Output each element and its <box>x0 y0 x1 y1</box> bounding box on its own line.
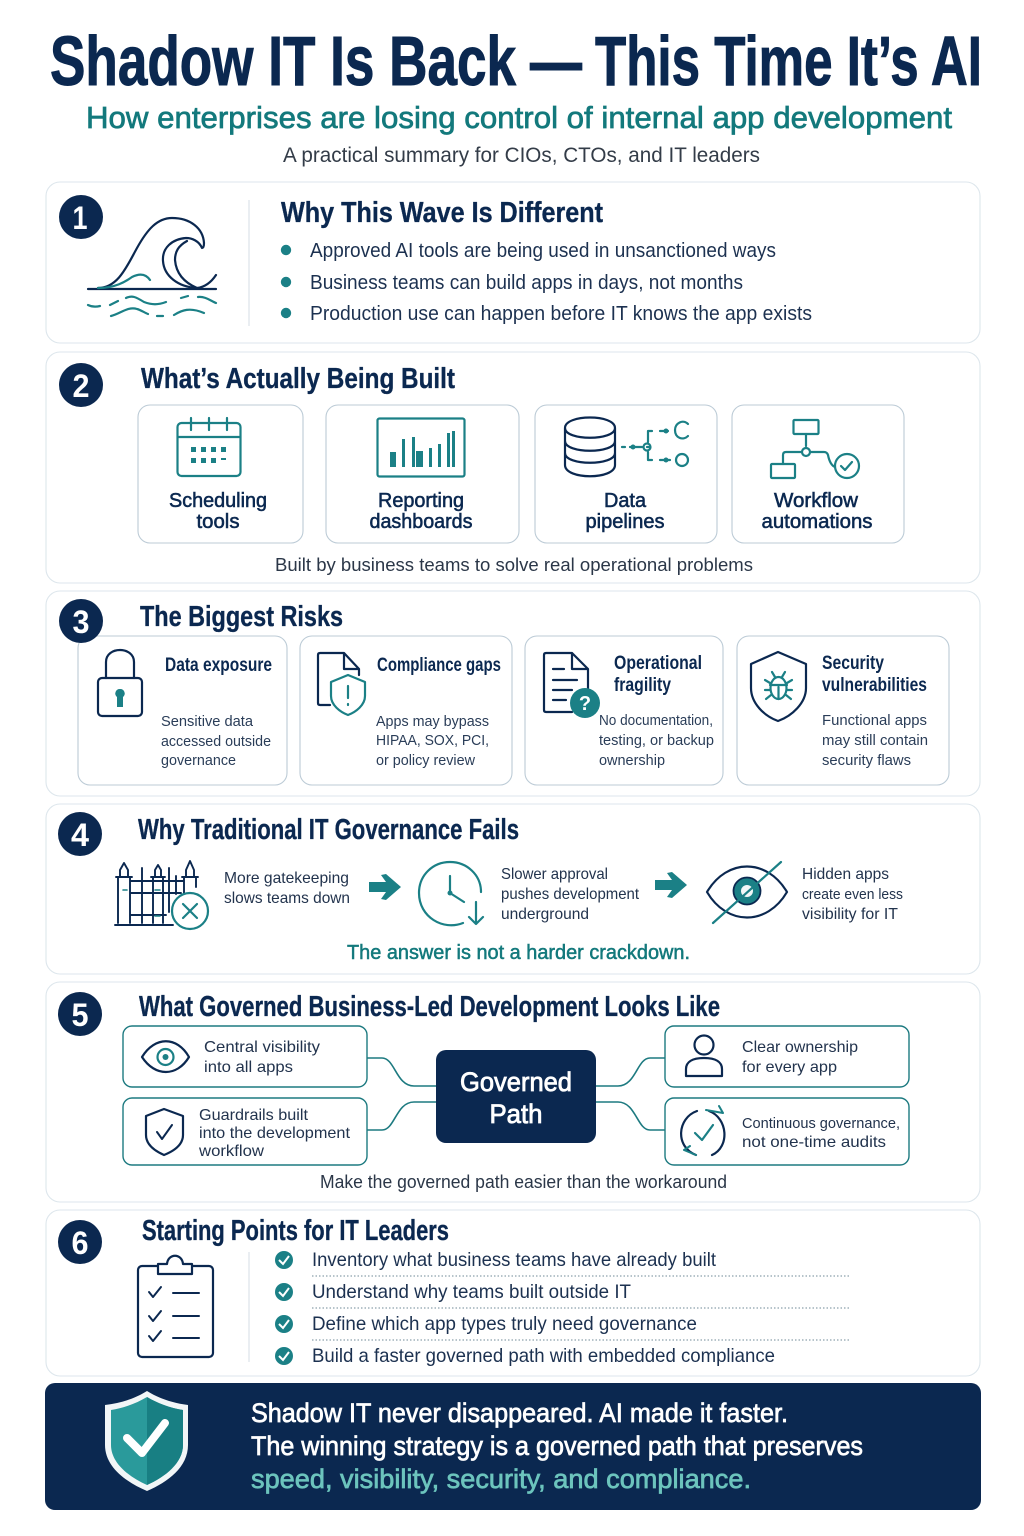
box: guardrails: Guardrails built <box>199 1107 309 1124</box>
text <box>251 1398 863 1494</box>
box: continuous governance: Continuous governance, <box>742 1115 900 1132</box>
card: scheduling tools: Scheduling <box>169 490 267 512</box>
heading: Why This Wave Is Different <box>281 197 603 229</box>
text: slower approval: pushes development <box>501 886 640 903</box>
card: reporting dashboards: dashboards <box>370 511 472 533</box>
number badge 2 <box>59 363 103 407</box>
text: slower approval: underground <box>501 906 589 923</box>
card: security vulnerabilities: security flaws <box>822 752 911 769</box>
card: security vulnerabilities: may still contain <box>822 732 928 749</box>
text: more gatekeeping <box>224 870 350 907</box>
panel: what's being built <box>46 352 980 583</box>
number badge 3 <box>59 599 103 643</box>
title: — <box>530 22 582 100</box>
box: clear ownership <box>665 1026 909 1087</box>
card: reporting dashboards: Reporting <box>378 490 464 512</box>
box: central visibility: into all apps <box>204 1059 293 1076</box>
banner: conclusion <box>45 1383 981 1510</box>
center node: governed path: Path <box>490 1099 542 1129</box>
heading: Why Traditional IT Governance Fails <box>138 814 519 846</box>
box: continuous governance: not one-time audits <box>742 1134 886 1151</box>
card: data exposure: accessed outside <box>161 733 271 750</box>
connectors <box>367 1058 665 1130</box>
text: slower approval <box>501 866 640 923</box>
text: hidden apps <box>802 866 903 923</box>
card: compliance gaps: Apps may bypass <box>376 713 489 730</box>
text: more gatekeeping: slows teams down <box>224 890 350 907</box>
bullet list: Approved AI tools are being used in unsanctioned ways <box>310 240 776 262</box>
checklist <box>275 1249 850 1367</box>
number badge 5: 5 <box>72 997 88 1033</box>
card: scheduling tools: tools <box>196 511 240 533</box>
card: data exposure <box>78 636 287 785</box>
text: The winning strategy is a governed path that preserves <box>251 1431 863 1461</box>
bullet list <box>281 240 812 325</box>
card: workflow automations: Workflow <box>774 490 859 512</box>
card: security vulnerabilities: Security <box>822 653 884 674</box>
card: operational fragility: fragility <box>614 675 671 696</box>
number badge 4 <box>58 812 102 856</box>
card: workflow automations: automations <box>762 511 872 533</box>
icon: clipboard <box>138 1256 213 1357</box>
text: hidden apps: visibility for IT <box>802 906 898 923</box>
card: data pipelines: pipelines <box>586 511 664 533</box>
card: operational fragility: Operational <box>614 653 702 674</box>
card: operational fragility: ownership <box>599 752 665 769</box>
text: speed, visibility, security, and compliance. <box>251 1464 751 1494</box>
box: central visibility <box>123 1026 367 1087</box>
heading: What’s Actually Being Built <box>141 363 455 395</box>
checklist: Understand why teams built outside IT <box>312 1281 631 1303</box>
card: compliance gaps <box>300 636 512 785</box>
card: operational fragility: No documentation, <box>599 712 713 729</box>
number badge 6 <box>58 1220 102 1264</box>
checklist: Build a faster governed path with embedded compliance <box>312 1345 775 1367</box>
checklist: Define which app types truly need governance <box>312 1313 697 1335</box>
card: data exposure: governance <box>161 752 236 769</box>
box: continuous governance <box>665 1098 909 1165</box>
number badge 1 <box>59 195 103 239</box>
box: guardrails <box>123 1098 367 1165</box>
icon: wave <box>88 218 216 316</box>
card: compliance gaps: or policy review <box>376 752 475 769</box>
heading: Starting Points for IT Leaders <box>142 1215 449 1247</box>
number badge 2: 2 <box>72 368 90 404</box>
box: central visibility: Central visibility <box>204 1039 320 1056</box>
tagline: A practical summary for CIOs, CTOs, and IT leaders <box>283 144 760 167</box>
card: reporting dashboards <box>326 405 519 543</box>
text: hidden apps: create even less <box>802 886 903 903</box>
card: data exposure: Sensitive data <box>161 713 254 730</box>
icon: gate with x <box>115 861 208 929</box>
box: guardrails: into the development <box>199 1125 351 1142</box>
card: data pipelines: Data <box>604 490 647 512</box>
number badge 6: 6 <box>72 1225 88 1261</box>
text: slower approval: Slower approval <box>501 866 608 883</box>
caption: Make the governed path easier than the workaround <box>320 1171 727 1192</box>
card: scheduling tools <box>138 405 303 543</box>
caption: Built by business teams to solve real operational problems <box>275 554 753 575</box>
bullet list: Production use can happen before IT knows the app exists <box>310 303 812 325</box>
panel: why governance fails <box>46 804 980 974</box>
heading: The Biggest Risks <box>140 601 343 633</box>
number badge 3: 3 <box>72 604 90 640</box>
center node: governed path <box>436 1050 596 1143</box>
card: operational fragility: testing, or backup <box>599 732 714 749</box>
card: compliance gaps: HIPAA, SOX, PCI, <box>376 732 489 749</box>
panel: starting points <box>46 1210 980 1376</box>
box: guardrails: workflow <box>198 1143 264 1160</box>
arrow <box>369 874 401 900</box>
number badge 5 <box>58 992 102 1036</box>
center node: governed path: Governed <box>460 1067 572 1097</box>
card: security vulnerabilities <box>737 636 949 785</box>
card: security vulnerabilities: Functional apps <box>822 712 927 729</box>
subtitle: How enterprises are losing control of internal app development <box>86 100 952 135</box>
checklist: Inventory what business teams have already built <box>312 1249 717 1271</box>
arrow <box>655 872 687 898</box>
card: data pipelines <box>535 405 717 543</box>
bullet list: Business teams can build apps in days, not months <box>310 272 743 294</box>
number badge 4: 4 <box>71 817 89 853</box>
title: Shadow IT Is Back <box>50 22 516 100</box>
panel: why this wave is different <box>46 182 980 343</box>
heading: What Governed Business-Led Development Looks Like <box>139 991 720 1023</box>
card: workflow automations <box>732 405 904 543</box>
panel: governed development <box>46 982 980 1202</box>
box: clear ownership: for every app <box>742 1059 837 1076</box>
card: security vulnerabilities: vulnerabilities <box>822 675 927 696</box>
box: clear ownership: Clear ownership <box>742 1039 858 1056</box>
icon: shield check <box>105 1391 188 1491</box>
callout: The answer is not a harder crackdown. <box>347 942 690 964</box>
title <box>50 22 982 100</box>
text: Shadow IT never disappeared. AI made it faster. <box>251 1398 788 1428</box>
number badge 1: 1 <box>72 200 88 236</box>
icon: clock <box>419 862 483 925</box>
card: compliance gaps: Compliance gaps <box>377 655 501 676</box>
card: operational fragility: ? <box>579 693 591 715</box>
text: hidden apps: Hidden apps <box>802 866 889 883</box>
card: data exposure: Data exposure <box>165 655 272 676</box>
card: operational fragility <box>525 636 723 785</box>
icon: crossed eye <box>707 862 787 923</box>
panel: biggest risks <box>46 591 980 796</box>
text: more gatekeeping: More gatekeeping <box>224 870 349 887</box>
